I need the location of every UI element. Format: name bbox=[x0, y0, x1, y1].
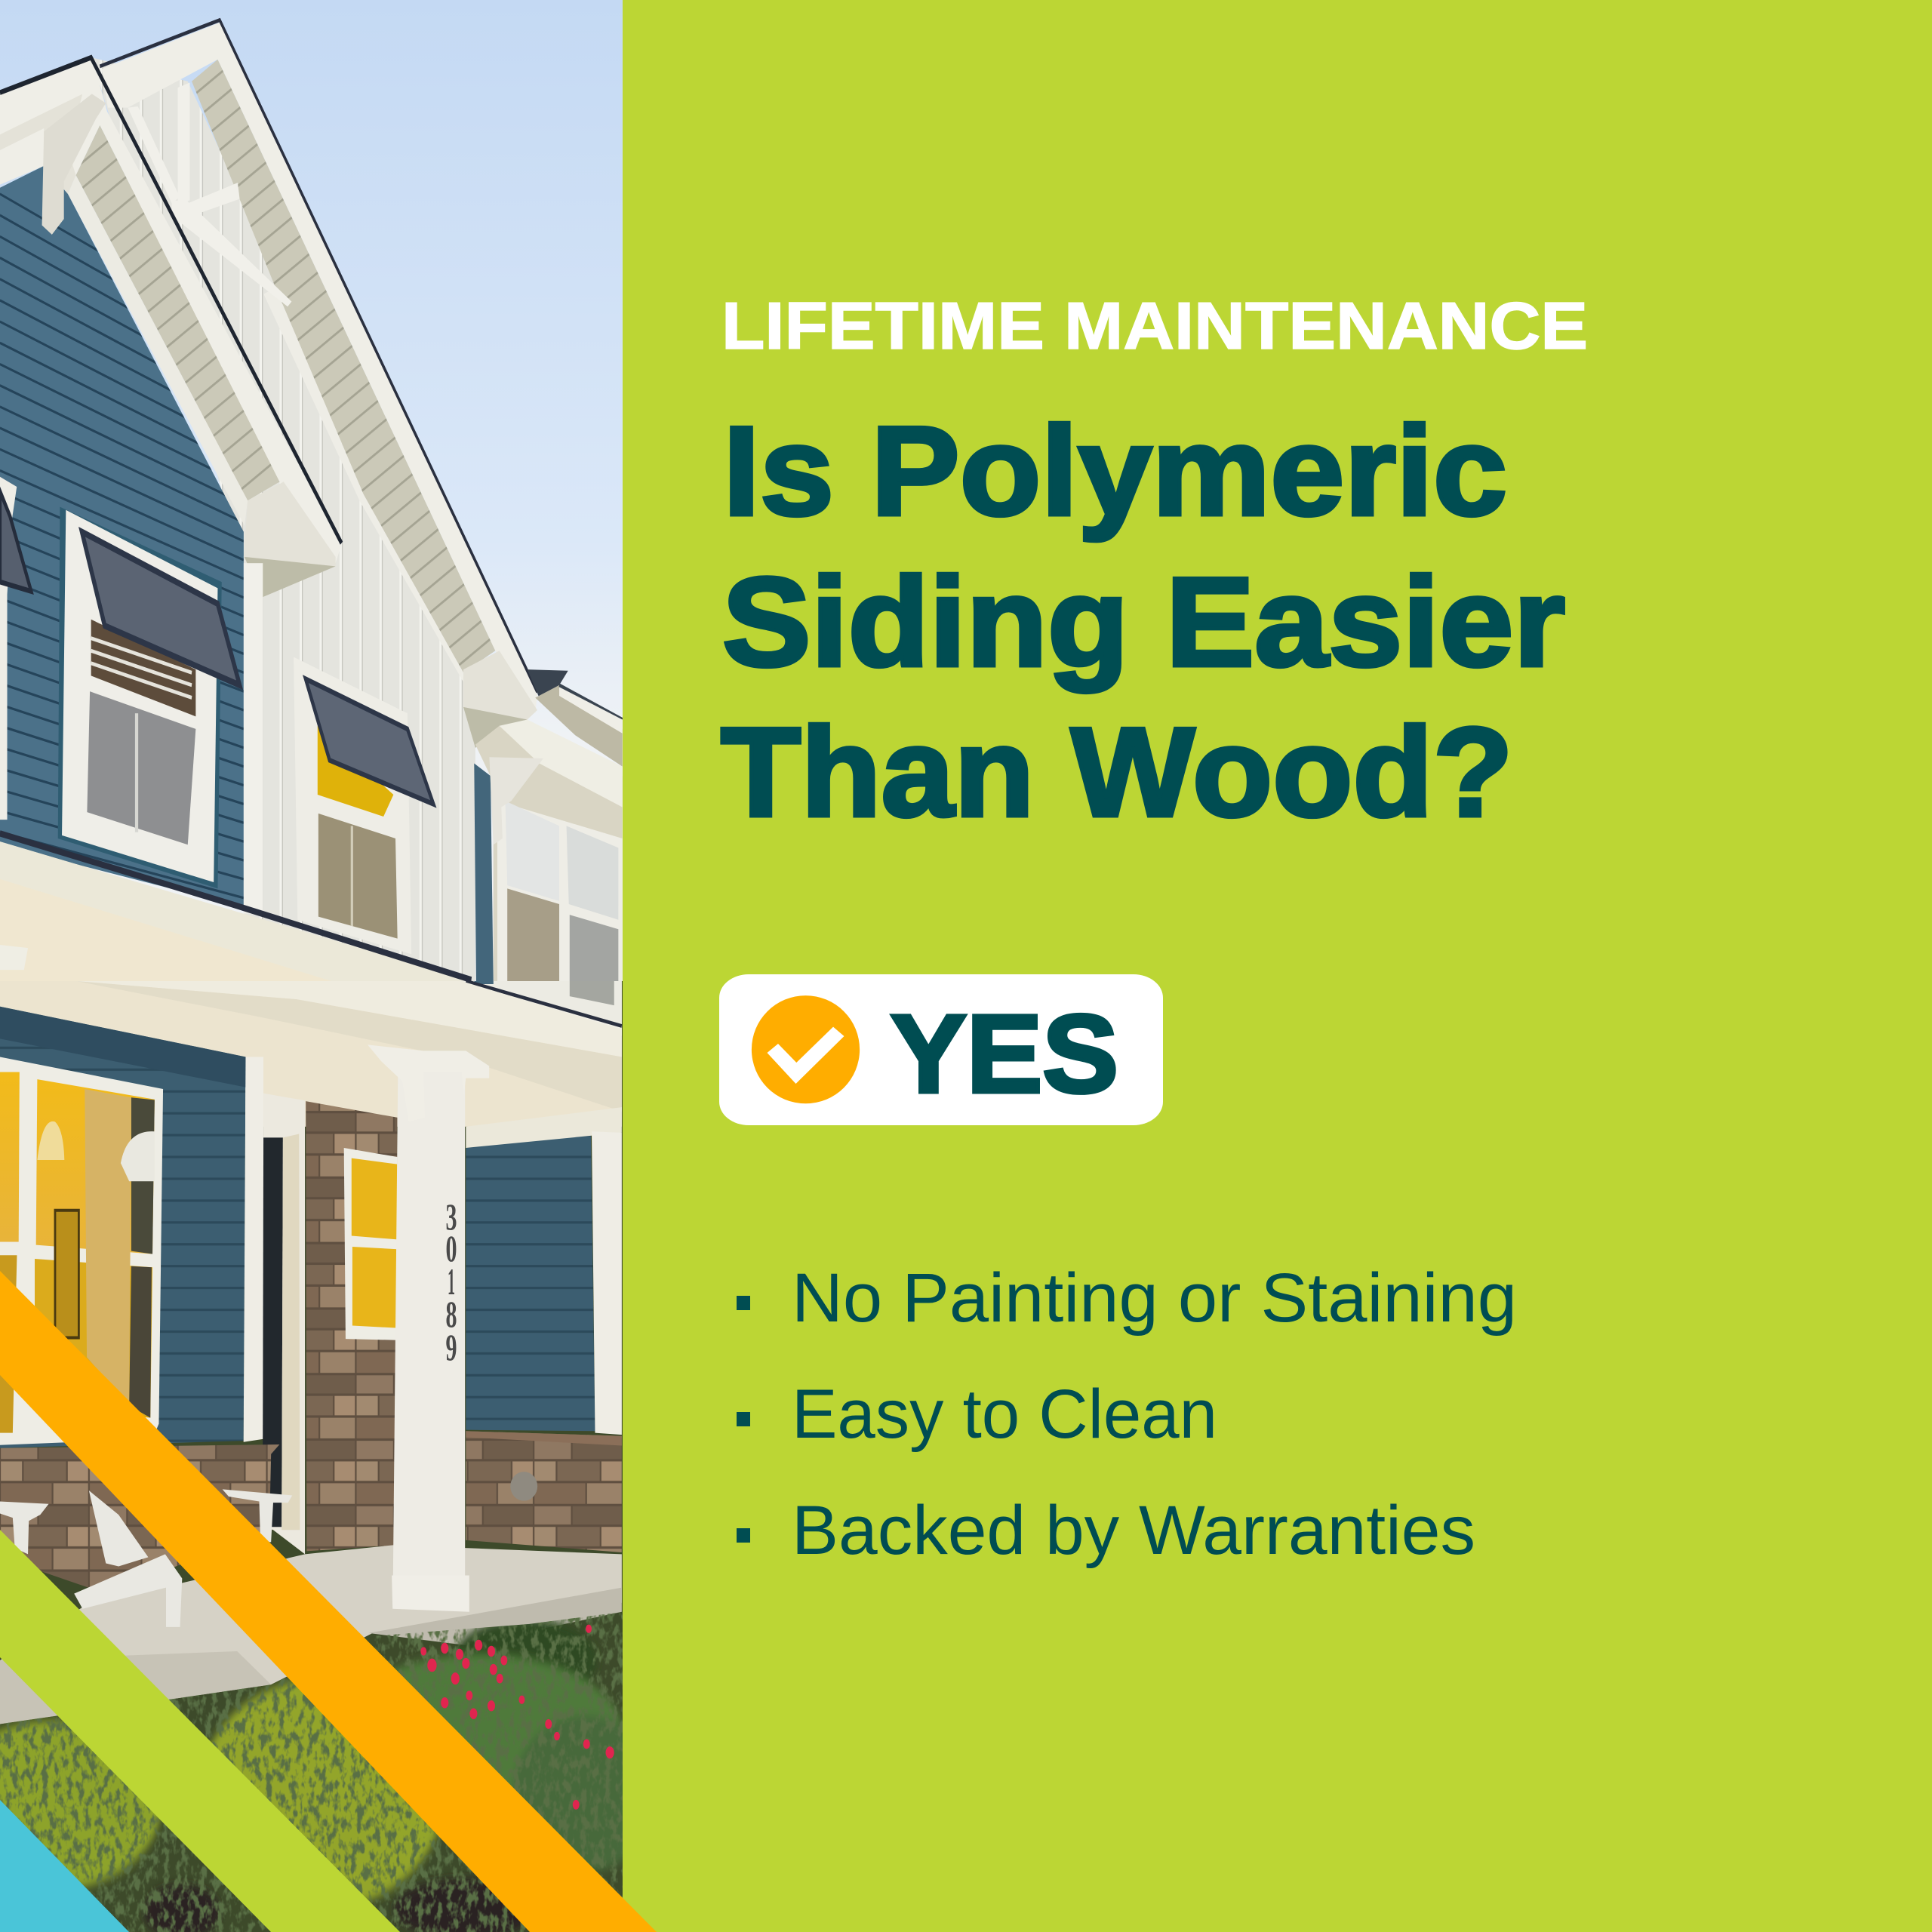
house number 30189: 0 bbox=[445, 1227, 457, 1269]
blue diagonal ribbon bbox=[0, 1800, 129, 1932]
green diagonal ribbon bbox=[0, 1530, 400, 1932]
porch floor bbox=[0, 1545, 622, 1724]
ground floor porch bbox=[0, 981, 657, 1932]
benefits list bbox=[737, 1260, 1517, 1569]
upper storey gables bbox=[0, 0, 624, 981]
far-left window and shutter bbox=[0, 477, 31, 820]
photo: house exterior bbox=[0, 0, 657, 1932]
stone wall by door bbox=[306, 1101, 397, 1551]
centre window bbox=[294, 657, 433, 954]
house number 30189 bbox=[446, 1204, 456, 1361]
bullet: easy to clean: Easy to Clean bbox=[792, 1376, 1217, 1453]
house number 30189: 3 bbox=[445, 1195, 457, 1238]
small lit window bbox=[344, 1148, 397, 1340]
orange diagonal ribbon bbox=[0, 1271, 657, 1932]
left upper window bbox=[58, 507, 240, 888]
adirondack chair bbox=[0, 1489, 292, 1627]
doorway bbox=[263, 1094, 305, 1554]
blue siding, lower left bbox=[0, 1007, 245, 1448]
blue siding wall bbox=[0, 166, 244, 907]
large lit window bbox=[0, 1057, 163, 1445]
icon: check circle bbox=[752, 995, 860, 1103]
right blue siding bbox=[466, 1134, 595, 1431]
house number 30189: 1 bbox=[448, 1260, 455, 1303]
porch column bbox=[368, 1044, 489, 1612]
house number 30189: 9 bbox=[445, 1326, 457, 1368]
bullet: no painting: No Painting or Staining bbox=[792, 1260, 1517, 1337]
house number 30189: 8 bbox=[445, 1293, 457, 1335]
eave gutter bbox=[0, 833, 472, 981]
main title: Is Polymeric bbox=[723, 400, 1507, 542]
right stone wall bbox=[466, 1431, 622, 1552]
main title: Siding Easier bbox=[722, 551, 1565, 693]
yes label: YES bbox=[891, 992, 1118, 1116]
yes badge bbox=[719, 974, 1163, 1125]
garden shrubs bbox=[0, 1612, 657, 1932]
main title bbox=[721, 400, 1565, 843]
main title: Than Wood? bbox=[721, 701, 1513, 843]
eyebrow heading: LIFETIME MAINTENANCE bbox=[721, 288, 1588, 363]
left stone knee wall bbox=[0, 1444, 279, 1594]
bullet: warranties: Backed by Warranties bbox=[792, 1492, 1475, 1569]
